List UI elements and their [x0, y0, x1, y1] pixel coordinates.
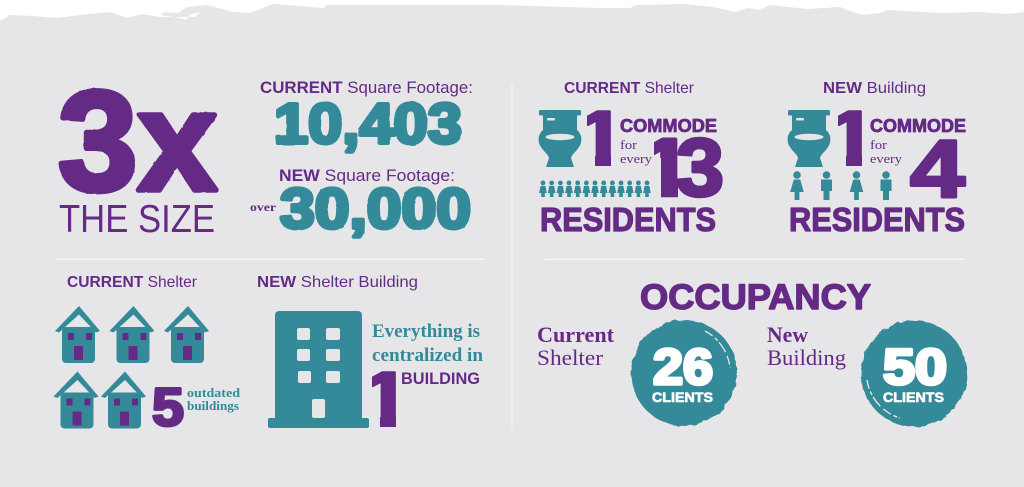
icon: house 2 — [110, 306, 154, 363]
panel: current shelter commodes — [539, 80, 724, 239]
icon: toilet — [539, 110, 581, 167]
icon: building — [268, 311, 369, 428]
heading: CURRENT Shelter — [67, 274, 198, 291]
for every label: for — [870, 137, 888, 152]
for every label: for — [620, 137, 638, 152]
number 1: 1 — [826, 94, 878, 182]
icon: house 3 — [164, 306, 209, 363]
building label: BUILDING — [401, 369, 480, 388]
current shelter label: Shelter — [537, 345, 604, 370]
badge: 26 clients: CLIENTS — [652, 389, 713, 405]
commode label: COMMODE — [620, 116, 717, 136]
panel: current shelter buildings — [54, 274, 241, 438]
current square footage heading: CURRENT Square Footage: — [260, 78, 473, 97]
panel: 3x the size — [58, 62, 217, 241]
icon: 13 residents row — [539, 180, 651, 197]
outdated buildings label: buildings — [187, 398, 239, 413]
outdated buildings label: outdated — [187, 385, 241, 400]
for every label: every — [620, 151, 653, 166]
big 3x: 3x — [58, 62, 217, 221]
badge: 50 clients — [861, 320, 967, 426]
number 13: 1 — [640, 122, 693, 214]
dividers — [55, 85, 965, 430]
over label: over — [250, 200, 277, 214]
panel: new building commodes — [788, 80, 966, 239]
number 4: 4 — [910, 124, 965, 215]
residents label: RESIDENTS — [789, 202, 965, 239]
heading: NEW Building — [823, 80, 926, 97]
icon: house 5 — [101, 372, 146, 428]
panel: new shelter building — [258, 276, 483, 428]
residents label: RESIDENTS — [540, 202, 716, 239]
badge: 50 clients: 50 — [883, 339, 947, 395]
current shelter label: Current — [537, 322, 615, 347]
new building label: Building — [767, 345, 846, 370]
new square footage value: 30,000 — [280, 177, 471, 241]
number 5: 5 — [152, 378, 184, 438]
panel: occupancy — [537, 278, 967, 426]
commode label: COMMODE — [870, 116, 966, 136]
for every label: every — [870, 151, 903, 166]
badge: 26 clients — [631, 320, 737, 426]
panel: square footage — [250, 78, 473, 241]
current square footage value: 10,403 — [274, 92, 462, 156]
icon: toilet — [788, 110, 830, 167]
everything is centralized text: Everything is — [372, 321, 480, 342]
everything is centralized text: centralized in — [372, 345, 483, 366]
the size label: THE SIZE — [59, 198, 215, 241]
icon: house 1 — [55, 306, 100, 363]
new square footage heading: NEW Square Footage: — [279, 166, 455, 185]
heading: CURRENT Shelter — [564, 80, 695, 97]
heading: OCCUPANCY — [640, 278, 871, 317]
number 1: 1 — [360, 355, 412, 443]
number 13 — [654, 136, 723, 198]
number 1: 1 — [575, 94, 627, 182]
icon: 4 residents — [790, 171, 892, 200]
badge: 26 clients: 26 — [653, 339, 713, 395]
new building label: New — [767, 322, 808, 347]
number 13: 3 — [676, 122, 724, 214]
torn top edge of the grey background — [0, 0, 1024, 20]
badge: 50 clients: CLIENTS — [883, 389, 944, 405]
icon: house 4 — [54, 372, 98, 428]
heading: NEW Shelter Building — [257, 274, 418, 291]
